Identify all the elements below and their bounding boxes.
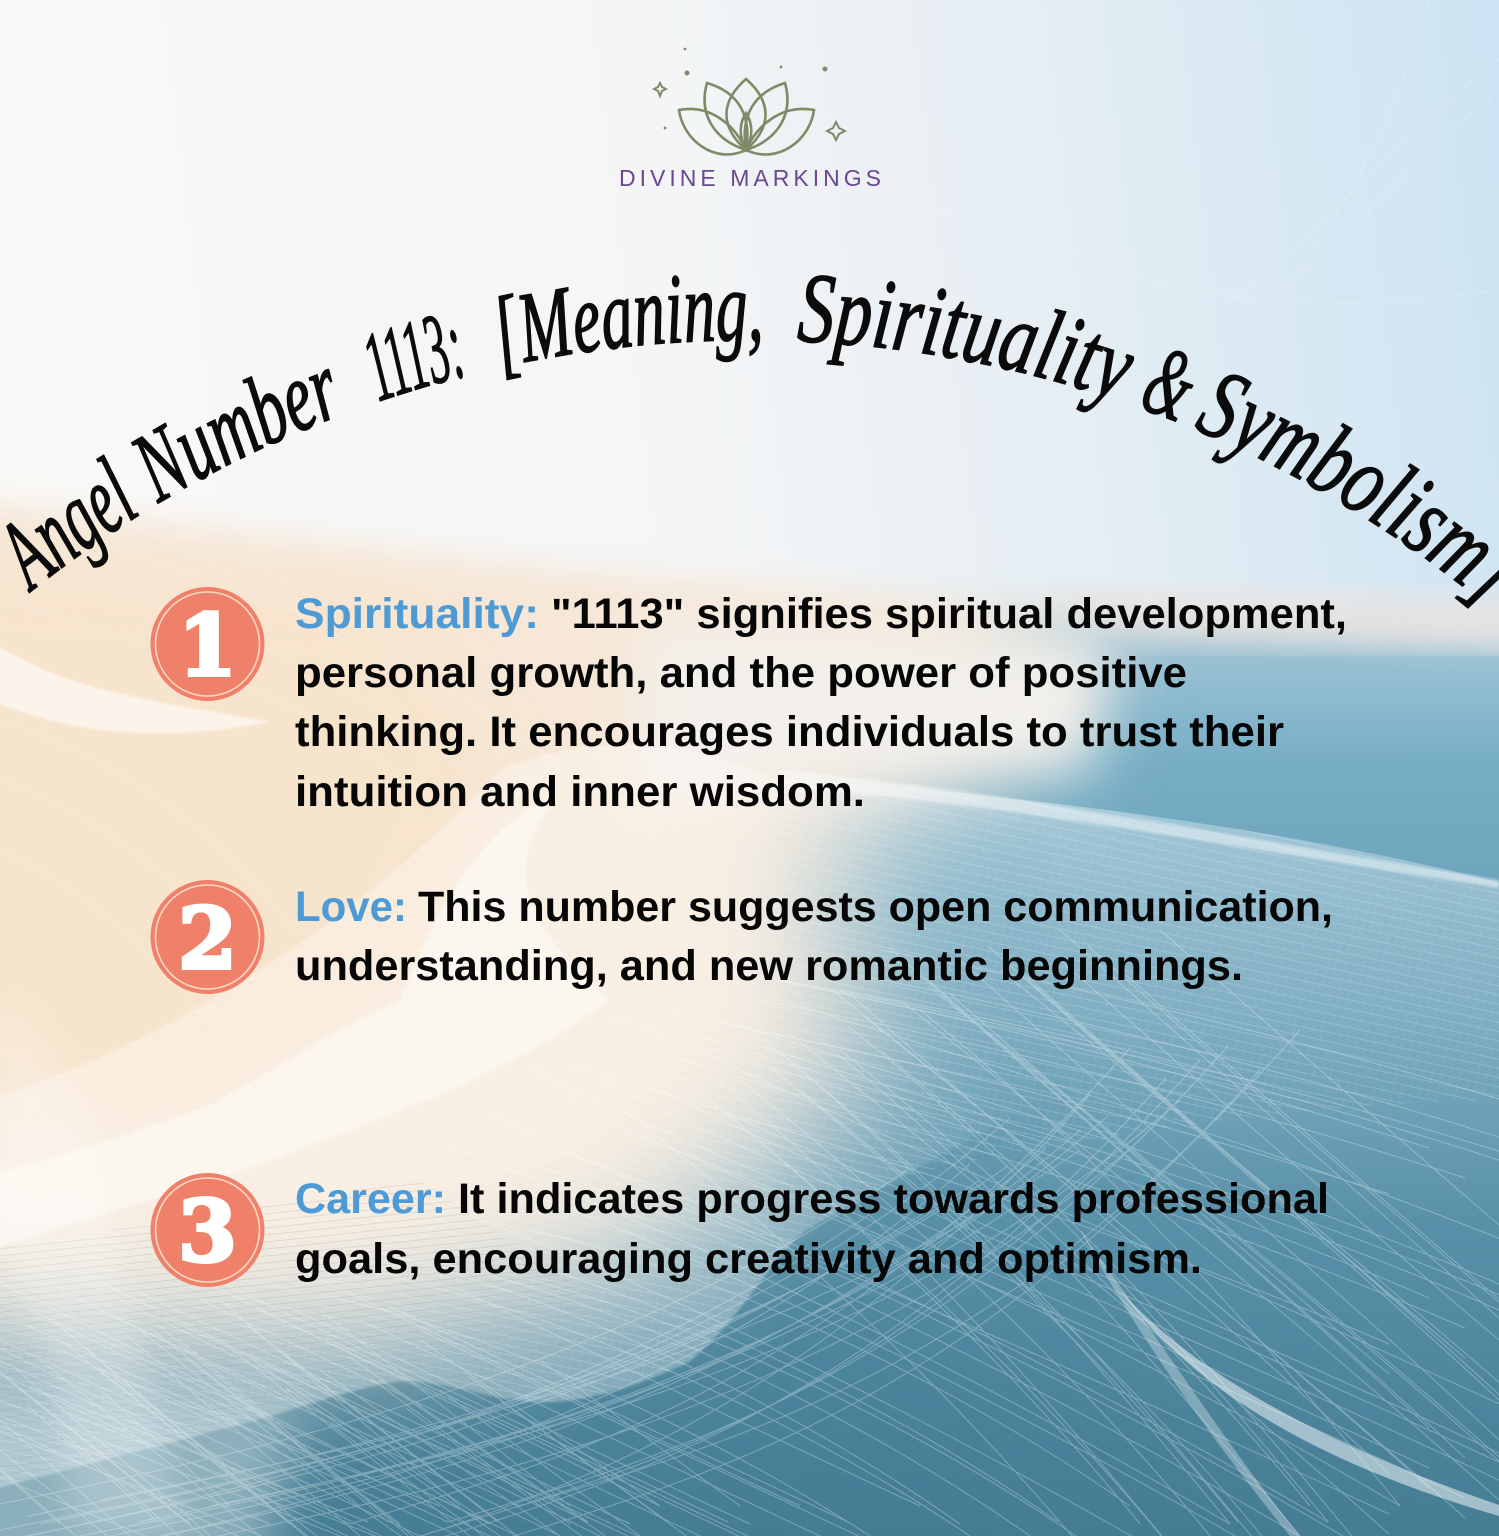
title: curved script heading: [Meaning, <box>498 275 760 380</box>
text: love: This number suggests open communication, <box>418 883 1333 931</box>
text: spirituality: personal growth, and the power of positive <box>295 649 1187 697</box>
text: spirituality: intuition and inner wisdom. <box>295 768 865 816</box>
text: love: Love: <box>295 883 407 931</box>
icon: number 2 badge <box>150 880 264 994</box>
title: curved script heading <box>6 275 1499 609</box>
title: curved script heading: & <box>1142 350 1194 422</box>
text: career: It indicates progress towards professional <box>458 1175 1329 1223</box>
icon: number 2 badge: 2 <box>178 889 237 988</box>
icon: sparkles <box>654 48 845 140</box>
panel: spirituality item <box>150 587 1347 816</box>
icon: number 3 badge: 3 <box>178 1182 237 1281</box>
title: curved script heading: Spirituality <box>797 275 1134 412</box>
icon: number 3 badge <box>150 1173 264 1287</box>
text: career: goals, encouraging creativity and optimism. <box>295 1235 1202 1283</box>
text: career: Career: <box>295 1175 446 1223</box>
title: curved script heading: 1113: <box>366 316 463 402</box>
text: spirituality: Spirituality: <box>295 590 539 638</box>
text: spirituality: "1113" signifies spiritual development, <box>551 590 1347 638</box>
icon: number 1 badge <box>150 587 264 701</box>
title: curved script heading: Number <box>130 368 332 504</box>
translucent veil: right with crisp upper edge <box>882 794 1499 1166</box>
icon: number 1 badge: 1 <box>178 596 237 695</box>
panel: career item <box>150 1173 1329 1287</box>
text: love <box>295 883 1333 990</box>
logo: Divine Markings <box>619 48 881 191</box>
translucent veil: lower left with crisp lower edge <box>0 745 1040 1490</box>
white ribbons <box>0 790 610 1250</box>
text: career <box>295 1175 1329 1283</box>
wordmark: DIVINE MARKINGS <box>619 165 881 191</box>
panel: love item <box>150 880 1333 994</box>
text: spirituality: thinking. It encourages individuals to trust their <box>295 708 1284 756</box>
text: spirituality <box>295 590 1347 816</box>
icon: lotus flower <box>679 79 814 154</box>
text: love: understanding, and new romantic beginnings. <box>295 942 1243 990</box>
